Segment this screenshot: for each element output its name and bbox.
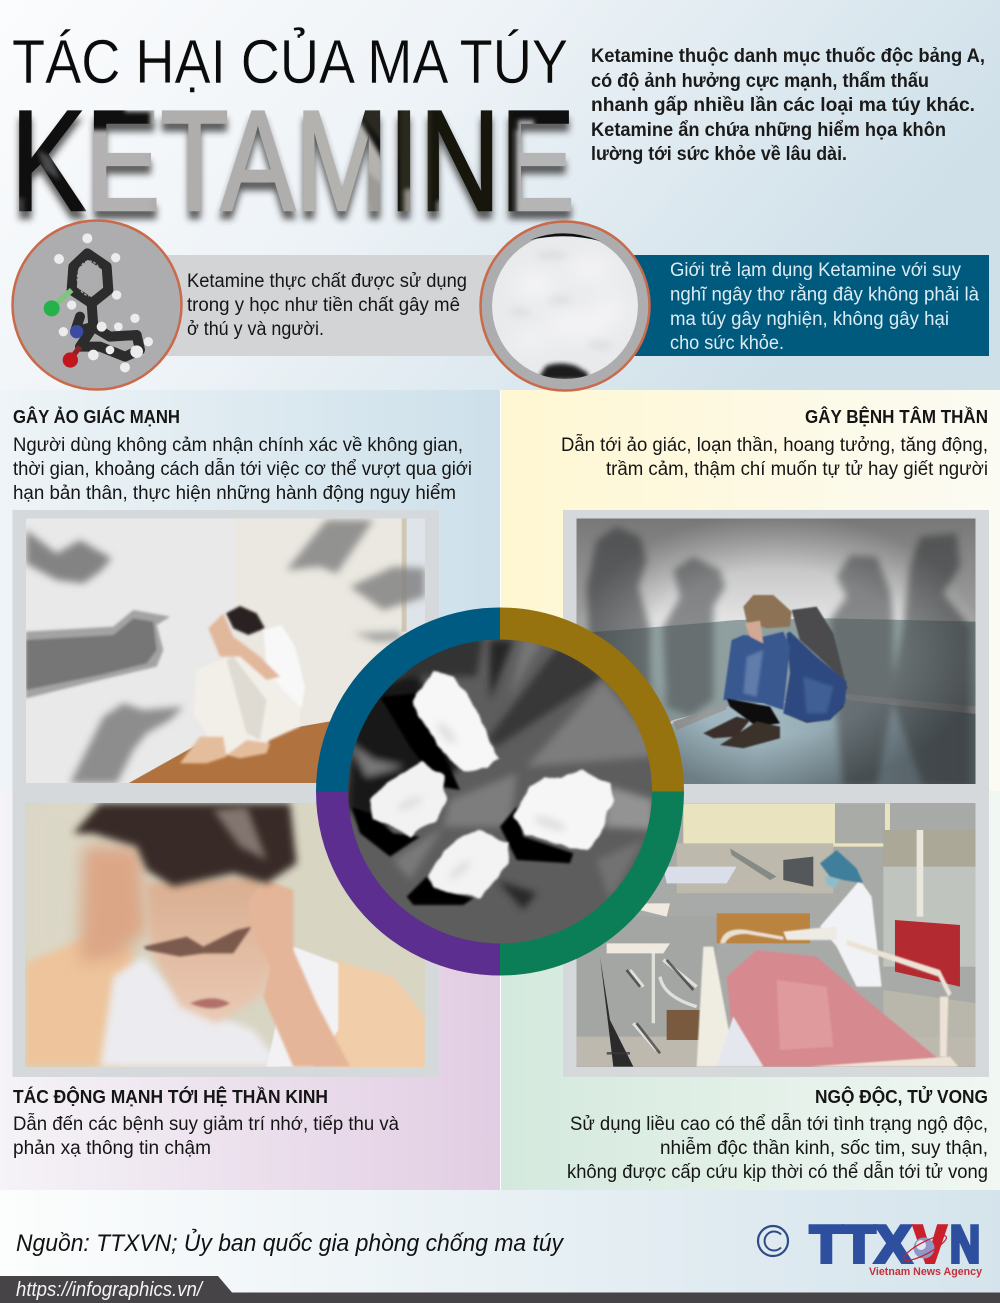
source line: Nguồn: TTXVN; Ủy ban quốc gia phòng chống ma túy xyxy=(16,1228,565,1257)
logo letters xyxy=(810,1216,980,1274)
panel: hallucination text: Người dùng không cảm nhận chính xác về không gian, xyxy=(13,435,463,456)
center photo: ketamine crystals xyxy=(347,637,653,944)
panel: poisoning text: NGỘ ĐỘC, TỬ VONG xyxy=(815,1086,988,1107)
intro text: Ketamine thuộc danh mục thuốc độc bảng A, xyxy=(591,46,985,67)
logo tagline: Vietnam News Agency xyxy=(869,1266,983,1278)
photo frame: hallucination xyxy=(12,510,439,793)
intro text: nhanh gấp nhiều lần các loại ma túy khác. xyxy=(591,95,975,116)
title word: KETAMINE: KETAMINE xyxy=(11,90,575,249)
ring: four coloured quarter arcs xyxy=(332,624,668,960)
intro text xyxy=(591,46,985,165)
photo: man holding his head in pain xyxy=(25,800,425,1070)
photo frame: poisoning xyxy=(563,793,989,1077)
panel: mental illness text: Dẫn tới ảo giác, loạn thần, hoang tưởng, tăng động, xyxy=(561,434,988,456)
panel: mental illness text: trầm cảm, thậm chí muốn tự tử hay giết người xyxy=(606,459,988,480)
panel: poisoning text: Sử dụng liều cao có thể dẫn tới tình trạng ngộ độc, xyxy=(570,1113,988,1135)
panel: medical use grey bar: ở thú y và người. xyxy=(187,319,324,340)
panel: upper left quadrant xyxy=(0,390,500,791)
title line: TÁC HẠI CỦA MA TÚY: TÁC HẠI CỦA MA TÚY xyxy=(12,28,568,97)
title: two-line heading xyxy=(11,28,575,249)
logo: TTXVN Vietnam News Agency xyxy=(758,1216,983,1278)
icon: ketamine molecule in circle xyxy=(12,220,182,390)
title word: KETAMINE: KETAMINE xyxy=(11,82,575,241)
panel: youth misuse blue bar: ma túy gây nghiện, không gây hại xyxy=(670,309,949,330)
panel: nervous system text xyxy=(13,1086,399,1159)
panel: youth misuse blue bar: cho sức khỏe. xyxy=(670,333,784,354)
panel: medical use grey bar xyxy=(160,255,505,356)
logo letters: TTX xyxy=(810,1216,911,1274)
logo letters: N xyxy=(950,1216,980,1274)
arc: green quarter xyxy=(500,792,668,960)
photo: nurse tending hospital patient xyxy=(576,803,977,1067)
icon: copyright xyxy=(758,1226,788,1256)
panel: nervous system text: Dẫn đến các bệnh suy giảm trí nhớ, tiếp thu và xyxy=(13,1113,399,1135)
logo globe xyxy=(901,1231,949,1265)
logo letters: V xyxy=(914,1216,946,1274)
panel: poisoning text xyxy=(567,1086,988,1183)
panel: youth misuse blue bar: nghĩ ngây thơ rằng đây không phải là xyxy=(670,284,979,306)
panel: hallucination text xyxy=(13,406,472,504)
panel: medical use grey bar: trong y học như tiền chất gây mê xyxy=(187,295,460,316)
panel: nervous system text: TÁC ĐỘNG MẠNH TỚI HỆ THẦN KINH xyxy=(13,1086,328,1107)
panel: hallucination text: GÂY ẢO GIÁC MẠNH xyxy=(13,406,180,427)
intro text: Ketamine ẩn chứa những hiểm họa khôn xyxy=(591,120,946,141)
panel: poisoning text: nhiễm độc thần kinh, sốc tim, suy thận, xyxy=(660,1137,988,1159)
panel: nervous system text: phản xạ thông tin chậm xyxy=(13,1138,211,1159)
arc: gold quarter xyxy=(500,624,668,792)
background: footer area xyxy=(0,1190,1000,1303)
panel: youth misuse blue bar: Giới trẻ lạm dụng Ketamine với suy xyxy=(670,260,961,281)
photo: man with head down and shadow figures xyxy=(570,513,983,790)
footer bar xyxy=(0,1276,1000,1303)
panel: medical use grey bar: Ketamine thực chất được sử dụng xyxy=(187,271,467,292)
intro text: lường tới sức khỏe về lâu dài. xyxy=(591,144,847,165)
footer bar: https://infographics.vn/ xyxy=(16,1279,204,1301)
panel: youth misuse blue bar xyxy=(620,255,989,356)
arc: purple quarter xyxy=(332,792,500,960)
panel: hallucination text: hạn bản thân, thực hiện những hành động nguy hiểm xyxy=(13,483,456,504)
panel: upper right quadrant xyxy=(501,390,1000,791)
icon: white ketamine powder in circle xyxy=(480,222,650,390)
panel: poisoning text: không được cấp cứu kịp thời có thể dẫn tới tử vong xyxy=(567,1161,988,1183)
photo: person cowering from grey hands xyxy=(26,518,427,784)
intro text: có độ ảnh hưởng cực mạnh, thẩm thấu xyxy=(591,71,929,92)
panel: lower right quadrant xyxy=(501,791,1000,1190)
panel: mental illness text xyxy=(561,406,988,480)
panel: hallucination text: thời gian, khoảng cách dẫn tới việc cơ thể vượt qua giới xyxy=(13,458,472,480)
panel: lower left quadrant xyxy=(0,791,500,1190)
photo frame: mental illness xyxy=(563,510,989,793)
arc: blue quarter xyxy=(332,624,500,792)
photo frame: nerve damage xyxy=(12,793,439,1077)
background: page top xyxy=(0,0,1000,390)
panel: mental illness text: GÂY BỆNH TÂM THẦN xyxy=(805,406,988,427)
